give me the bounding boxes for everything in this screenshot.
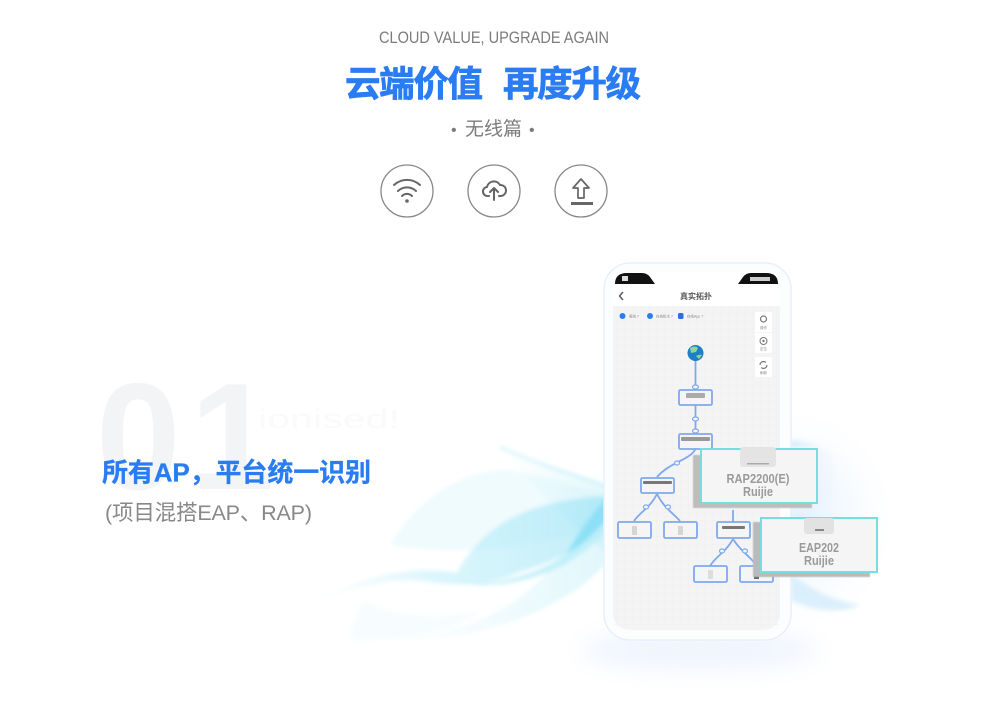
number watermark	[96, 352, 400, 522]
title: 再度升级	[503, 64, 641, 104]
callout: RAP2200(E)	[701, 447, 817, 503]
background glow behind phone	[580, 410, 895, 670]
icon: cloud upload	[468, 165, 520, 217]
phone	[604, 263, 791, 640]
legend chips	[620, 313, 703, 319]
number watermark: 0	[96, 352, 181, 522]
number watermark: 1	[190, 352, 275, 522]
status bar	[613, 272, 780, 286]
section label: •	[529, 122, 535, 139]
title: 云端价值	[345, 64, 483, 104]
decorative wave ribbons	[317, 440, 860, 640]
side buttons: 定位	[760, 346, 768, 351]
text: feature heading: 所有AP，平台统一识别	[102, 458, 371, 488]
side buttons: 刷新	[760, 370, 768, 375]
section label: •	[451, 122, 457, 139]
text: feature note: (项目混搭EAP、RAP)	[105, 501, 312, 525]
number watermark: ionised!	[258, 404, 400, 434]
section label: 无线篇	[465, 118, 522, 140]
subtitle: English tagline: CLOUD VALUE, UPGRADE AGAIN	[379, 29, 609, 47]
side buttons: 操作	[760, 325, 768, 330]
callout: EAP202: EAP202	[799, 540, 839, 555]
topology diagram	[618, 360, 773, 582]
nav bar: 真实拓扑	[680, 291, 712, 301]
callout: EAP202: Ruijie	[804, 553, 834, 568]
callout: RAP2200(E): RAP2200(E)	[726, 471, 790, 486]
legend chips: 离线 7	[629, 314, 639, 318]
card shadows	[693, 455, 870, 577]
icon: wifi	[381, 165, 433, 217]
globe icon	[688, 345, 704, 361]
legend chips: 在线机木 7	[656, 314, 673, 318]
legend chips: 在线App 7	[687, 314, 703, 318]
section label	[451, 118, 535, 140]
phone body	[604, 263, 791, 640]
phone screen	[613, 272, 780, 630]
side buttons	[755, 312, 772, 377]
title	[345, 64, 641, 104]
nav bar	[613, 284, 780, 306]
callout: RAP2200(E): Ruijie	[743, 484, 773, 499]
callout: EAP202	[761, 518, 877, 572]
icon: upgrade arrow	[555, 165, 607, 217]
